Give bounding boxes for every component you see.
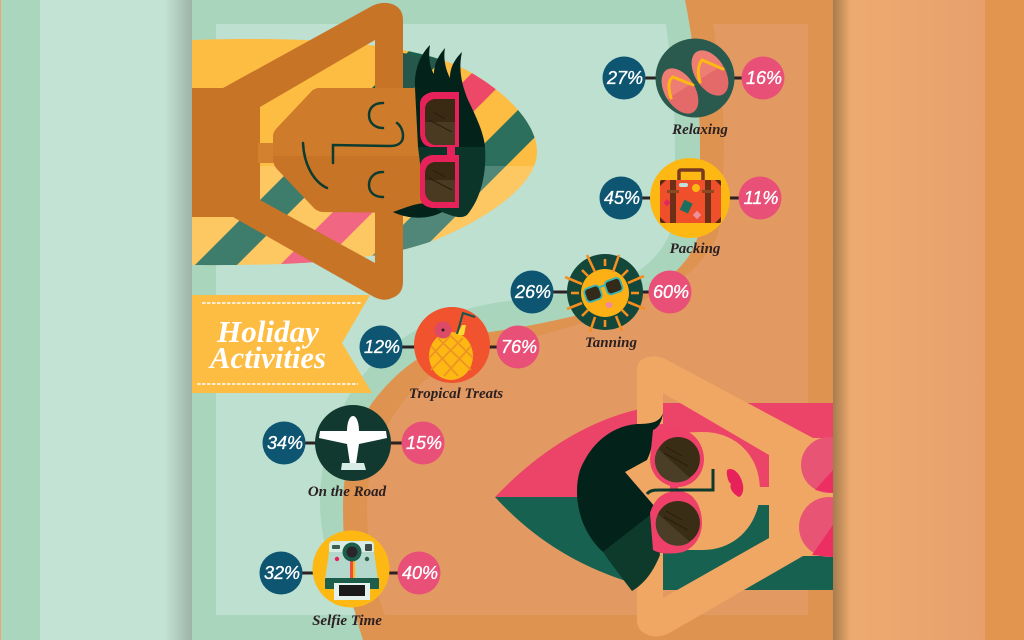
stat: Tanning: 60% <box>653 282 689 302</box>
stat: Packing: 45% <box>604 188 640 208</box>
title banner <box>192 295 372 393</box>
stat: On the Road <box>262 405 444 500</box>
stat: Tanning: Tanning <box>585 335 637 351</box>
woman's lips <box>727 469 743 497</box>
stat: Tropical Treats: 76% <box>501 337 537 357</box>
man's striped towel <box>192 39 537 266</box>
title banner: Activities <box>208 340 326 375</box>
woman sunbathing <box>577 356 859 637</box>
icon: sun with sunglasses <box>565 254 645 332</box>
man's hair <box>393 45 485 218</box>
woman's nose line <box>647 469 713 494</box>
man's body and arms <box>192 3 403 300</box>
stat: Packing: Packing <box>670 241 721 257</box>
woman's towel <box>490 400 835 597</box>
woman's chest <box>799 437 833 557</box>
main panel background <box>192 0 833 640</box>
icon: suitcase <box>650 158 730 238</box>
icon: pineapple drink <box>414 307 490 383</box>
man's face <box>273 88 424 213</box>
blurred background right <box>833 0 1024 640</box>
stat: Selfie Time: 32% <box>264 563 300 583</box>
stat: Tropical Treats: 12% <box>364 337 400 357</box>
stat: On the Road: On the Road <box>308 484 387 500</box>
stat: Relaxing: 16% <box>746 68 782 88</box>
stat: On the Road: 15% <box>406 433 442 453</box>
stat: On the Road: 34% <box>267 433 303 453</box>
stat: Selfie Time: 40% <box>402 563 438 583</box>
icon: flip flops <box>654 38 736 120</box>
woman's sunglasses <box>650 428 704 554</box>
man's sunglasses <box>420 92 459 208</box>
icon: airplane <box>315 405 391 481</box>
icon: instant camera <box>312 530 390 608</box>
stat: Tropical Treats: Tropical Treats <box>409 386 503 402</box>
stat: Packing: 11% <box>744 188 778 208</box>
stat: Tropical Treats <box>360 307 540 402</box>
woman's face <box>625 432 760 550</box>
stat: Selfie Time <box>260 530 440 629</box>
stat: Relaxing: 27% <box>606 68 643 88</box>
title banner: Holiday <box>216 314 319 349</box>
man sunbathing <box>192 3 485 300</box>
stat: Relaxing: Relaxing <box>671 122 728 138</box>
stat: Selfie Time: Selfie Time <box>312 613 382 629</box>
blurred background left <box>0 0 192 640</box>
woman's hair <box>577 413 663 591</box>
woman's arms and torso <box>637 356 833 637</box>
stat: Packing <box>600 158 782 257</box>
stat: Tanning <box>510 254 692 351</box>
stat: Relaxing <box>602 38 784 138</box>
stat: Tanning: 26% <box>514 282 551 302</box>
